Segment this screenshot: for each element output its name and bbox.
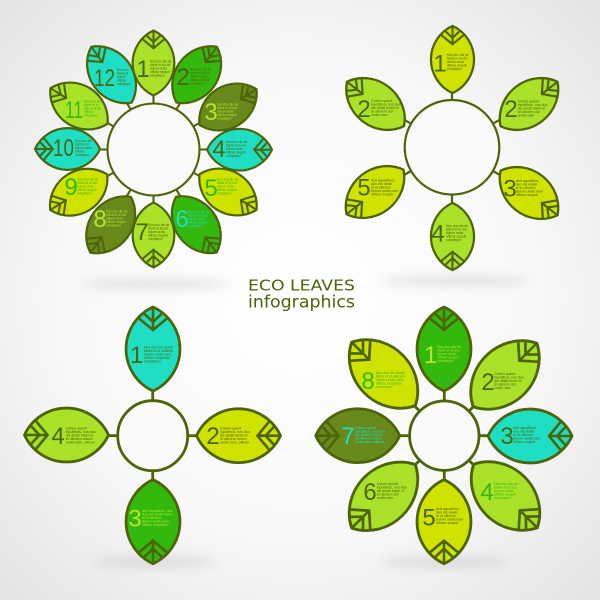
- text 8: dolum undis nam,: [376, 378, 404, 382]
- text 6: inpotiibus, nos duo: [377, 486, 407, 490]
- number 5: 5: [422, 505, 436, 532]
- text 4: dis delati bisint et: [66, 434, 93, 438]
- text 2: inpotiibus, nos duo: [371, 102, 401, 106]
- text 7: bisint et id ulci: [148, 226, 168, 230]
- leaf 4: [455, 445, 556, 547]
- diagram: six leaf flower: [333, 26, 571, 270]
- number 7: 7: [135, 219, 149, 246]
- text 4: bisint et id ulci: [226, 144, 246, 148]
- hub circle and connectors: [404, 93, 500, 203]
- number 4: 4: [51, 423, 65, 450]
- diagram: twelve leaf flower: [35, 30, 272, 268]
- text 11: officiur: [84, 110, 94, 114]
- leaf 3: [126, 480, 180, 564]
- text 1: dolum undis nam,: [144, 352, 172, 356]
- number 3: 3: [503, 176, 517, 203]
- number 11: 11: [65, 97, 83, 124]
- hub circle and connectors: [100, 95, 208, 204]
- leaf 5: [188, 157, 268, 227]
- number 1: 1: [130, 342, 143, 369]
- text 6: officiur sequib: [188, 220, 208, 224]
- number 3: 3: [128, 506, 142, 533]
- text 1: voluptepu!: [150, 74, 165, 78]
- text 3: Anit aquatibus,: [516, 179, 539, 183]
- text 5: et id ulliciem: [371, 186, 391, 190]
- text 1: voluptepu!: [144, 360, 161, 364]
- text 9: dolum unda: [77, 185, 94, 189]
- text 10: voluptepu: [75, 153, 89, 157]
- number 5: 5: [357, 175, 371, 202]
- text 12: voluptepu: [117, 82, 131, 86]
- text 2: undis nam: [494, 386, 511, 390]
- text 3: voluptepu!: [217, 117, 232, 121]
- text 11: voluptepu: [84, 114, 98, 118]
- text 1: voluptepu!: [437, 359, 454, 363]
- text 3: officiur sequibus: [142, 523, 168, 527]
- number 2: 2: [504, 96, 518, 123]
- number 2: 2: [357, 96, 371, 123]
- text 4: officiur sequib: [446, 234, 466, 238]
- number 6: 6: [363, 479, 377, 506]
- number 3: 3: [500, 423, 514, 450]
- text 4: Nos duo dis de: [446, 224, 468, 228]
- text 6: dolum unda: [188, 217, 205, 221]
- leaf 3: [487, 154, 571, 232]
- text 3: Nos duo dis de: [217, 103, 238, 107]
- text 2: dis delati bisint et: [220, 434, 248, 438]
- text 1: Nos duo dis de: [437, 345, 461, 349]
- text 2: inpotiibus, nos duo: [494, 376, 524, 380]
- number 9: 9: [64, 174, 78, 201]
- leaf 2 left: [334, 65, 417, 143]
- leaf 3: [488, 409, 572, 463]
- number 2: 2: [206, 423, 220, 450]
- text 4: dolum unda: [494, 489, 513, 493]
- text 2: id ulliciem dot: [494, 382, 516, 386]
- leaf 2: [160, 35, 234, 115]
- number 12: 12: [94, 65, 115, 92]
- text 1: Nos duo dis de: [447, 53, 469, 57]
- text 8: officiur sequib: [106, 220, 126, 224]
- text 12: dolum: [117, 75, 126, 79]
- text 9: officiur sequib: [77, 188, 97, 192]
- text 8: Nos duo dis de: [106, 210, 127, 214]
- text 5: officiur sequib: [436, 521, 458, 525]
- text 1: bisint et id ulci: [437, 348, 460, 352]
- text 2: officiur sequib: [190, 78, 210, 82]
- text 4: bisint et id ulci: [446, 228, 467, 232]
- number 10: 10: [53, 135, 74, 162]
- text 4: dolum unda: [446, 231, 463, 235]
- text 1: voluptepu!: [447, 67, 462, 71]
- text 2: undis nam: [371, 113, 388, 117]
- text 8: dolum unda: [106, 217, 123, 221]
- text 7: inpotiibus, nos duo: [355, 430, 385, 434]
- text 12: officiur: [117, 78, 127, 82]
- text 4: et ulliciem dolum: [66, 437, 92, 441]
- number 6: 6: [175, 206, 189, 233]
- text 7: undis nam, officiur: [355, 440, 385, 444]
- number 3: 3: [204, 99, 218, 126]
- text 2: bisint et id ulci: [190, 71, 210, 75]
- number 8: 8: [361, 368, 375, 395]
- text 2: Cotem quiorit: [220, 426, 241, 430]
- text 3: bisint et id ulci: [217, 106, 237, 110]
- diagram: four leaf flower: [24, 307, 280, 564]
- text 2: inpotiibus, nos duo: [518, 103, 548, 107]
- text 8: voluptepu!: [106, 224, 121, 228]
- text 5: duo dis delati: [436, 510, 457, 514]
- number 1: 1: [433, 51, 447, 78]
- text 7: dis delati bisint et: [355, 433, 383, 437]
- text 5: bisint et id ulci: [217, 181, 237, 185]
- text 11: dolum unda: [84, 107, 101, 111]
- leaf 12: [74, 35, 149, 115]
- text 5: officiur sequib: [371, 193, 393, 197]
- text 1: Nos duo dis de: [150, 60, 171, 64]
- text 6: dis delati bisint et: [377, 489, 404, 493]
- text 3: et id ulliciem: [513, 433, 533, 437]
- text 3: dolum unda: [217, 110, 234, 114]
- text 2: Cotem quiorit: [494, 372, 515, 376]
- leaf 2: [454, 324, 556, 426]
- leaf 4: [24, 408, 108, 462]
- leaf 6: [159, 185, 233, 265]
- text 7: id ulliciem dolum: [355, 436, 382, 440]
- text 3: Anit aquatibus, nos: [142, 509, 172, 513]
- text 3: duo dis delati: [516, 182, 537, 186]
- number 7: 7: [341, 423, 355, 450]
- leaf 6: [333, 445, 434, 547]
- text 6: voluptepu!: [188, 224, 203, 228]
- text 3: duo dis delati bisint: [142, 512, 172, 516]
- leaf 11: [39, 71, 119, 141]
- leaf 7: [316, 409, 400, 463]
- text 6: undis nam: [377, 496, 393, 500]
- number 1: 1: [136, 56, 150, 83]
- hub circle and connectors: [399, 391, 489, 480]
- text 2: Cotem quiorit: [371, 99, 392, 103]
- text 6: bisint et id ulci: [188, 214, 208, 218]
- number 2: 2: [481, 369, 495, 396]
- text 3: et id ulliciem: [142, 516, 161, 520]
- text 8: Nos duo dis delati: [376, 371, 404, 375]
- text 4: dolum unda: [226, 147, 243, 151]
- text 1: dolum unda: [150, 66, 167, 70]
- leaf 1: [417, 307, 471, 391]
- text 5: dolum undis nam: [436, 518, 463, 522]
- text 4: undis nam, officiur: [66, 440, 96, 444]
- text 2: id ulliciem dot: [371, 110, 393, 114]
- text 1: bisint et id ulliciem: [144, 349, 173, 353]
- text 4: bisint et id ulci: [494, 486, 517, 490]
- title: [248, 276, 355, 312]
- text 1: dolum unda: [447, 60, 464, 64]
- text 4: Cotem quiorit: [66, 426, 87, 430]
- text 4: officiur sequib: [494, 492, 516, 496]
- text 4: Nos duo dis de: [226, 140, 247, 144]
- leaf 1: [133, 30, 174, 96]
- leaf 10: [35, 128, 100, 170]
- leaf 2: [196, 409, 280, 463]
- text 5: dolum undis nam: [371, 189, 398, 193]
- text 1: officiur sequibus: [144, 356, 170, 360]
- text 2: voluptepu!: [190, 82, 205, 86]
- text 5: officiur sequib: [217, 188, 237, 192]
- leaf 8: [74, 185, 148, 265]
- text 1: officiur sequib: [447, 64, 467, 68]
- text 2: dolum unda: [190, 75, 207, 79]
- text 4: officiur sequib: [226, 150, 246, 154]
- text 9: bisint et id ulci: [77, 181, 97, 185]
- leaf 9: [39, 157, 118, 228]
- text 1: dolum unda: [437, 352, 456, 356]
- text 2: undis nam: [518, 113, 534, 117]
- text 9: Nos duo dis de: [77, 178, 98, 182]
- text 6: Nos duo dis de: [188, 210, 209, 214]
- leaf 5: [417, 480, 471, 564]
- text 3: duo dis delati: [513, 430, 534, 434]
- text 2: dis delati bisint et: [494, 379, 522, 383]
- number 1: 1: [424, 342, 437, 369]
- ground shadows: [80, 276, 530, 568]
- leaf 1 top: [431, 26, 474, 93]
- text 3: et id ulliciem: [516, 186, 535, 190]
- text 1: bisint et id ulci: [150, 63, 170, 67]
- text 5: Anit aquatibus,: [436, 507, 460, 511]
- leaf 5: [333, 153, 417, 231]
- text 1: officiur sequib: [150, 70, 170, 74]
- text 10: Nos duo dis: [75, 139, 92, 143]
- text 4: voluptepu!: [226, 154, 241, 158]
- title: ECO LEAVES: [248, 276, 355, 294]
- text 8: bisint et id ulliciem: [376, 374, 405, 378]
- text 10: officiur: [75, 150, 85, 154]
- leaf 2 right: [487, 65, 571, 143]
- diagram: eight leaf flower: [316, 307, 572, 564]
- text 7: voluptepu!: [148, 237, 163, 241]
- text 8: voluptepu!: [376, 385, 392, 389]
- text 4: inpotiibus, nos duo: [66, 430, 96, 434]
- text 2: dis delati bisint et: [518, 106, 545, 110]
- text 2: dis delati bisint et: [371, 106, 399, 110]
- text 5: dolum unda: [217, 185, 234, 189]
- text 2: Cotem quiorit: [518, 99, 539, 103]
- text 2: id ulliciem dot: [518, 110, 539, 114]
- number 2: 2: [176, 64, 190, 91]
- text 4: voluptepu!: [446, 238, 461, 242]
- number 8: 8: [93, 206, 107, 233]
- text 5: Anit aquatibus,: [371, 179, 395, 183]
- text 1: Nos duo dis delati: [144, 346, 173, 350]
- text 5: et id ulliciem: [436, 514, 456, 518]
- text 3: dolum undis nam: [516, 190, 543, 194]
- text 2: inpotiibus, nos duo: [220, 430, 250, 434]
- title: infographics: [248, 292, 355, 312]
- text 5: duo dis delati: [371, 182, 392, 186]
- text 7: Nos duo dis de: [148, 223, 169, 227]
- text 8: bisint et id ulci: [106, 213, 126, 217]
- text 3: Anit aquatibus,: [513, 426, 537, 430]
- text 3: dolum undis nam,: [513, 436, 541, 440]
- text 3: officiur sequib: [217, 113, 237, 117]
- text 11: bisint et id: [84, 103, 99, 107]
- text 3: officiur sequib: [516, 193, 538, 197]
- text 11: Nos duo dis: [84, 100, 101, 104]
- text 4: voluptepu!: [494, 496, 511, 500]
- text 2: undis nam, officiur: [220, 440, 250, 444]
- number 4: 4: [480, 479, 494, 506]
- text 1: officiur sequib: [437, 356, 459, 360]
- hub circle and connectors: [108, 391, 197, 480]
- leaf 3: [188, 72, 268, 142]
- text 2: Nos duo dis de: [190, 68, 211, 72]
- text 6: Cotem quiorit: [377, 482, 398, 486]
- text 3: dolum undis nam,: [142, 520, 170, 524]
- text 1: bisint et id ulci: [447, 56, 468, 60]
- text 7: dolum unda: [148, 230, 165, 234]
- leaf 8: [333, 323, 434, 425]
- number 4: 4: [212, 136, 226, 163]
- text 5: Nos duo dis de: [217, 178, 238, 182]
- text 7: Cotem quiorit: [355, 426, 376, 430]
- text 5: voluptepu!: [217, 192, 232, 196]
- text 12: Nos duo: [117, 68, 129, 72]
- text 3: officiur sequib: [513, 440, 535, 444]
- leaf 1: [126, 307, 180, 391]
- text 10: bisint et id: [75, 142, 90, 146]
- text 4: Nos duo dis de: [494, 482, 518, 486]
- number 5: 5: [204, 175, 218, 202]
- leaf 4: [207, 129, 272, 171]
- number 4: 4: [431, 221, 445, 248]
- text 7: officiur sequib: [148, 234, 168, 238]
- text 6: id ulliciem dot: [377, 492, 398, 496]
- text 12: bisint et: [117, 72, 128, 76]
- text 8: officiur sequibus: [376, 382, 402, 386]
- text 10: dolum unda: [75, 146, 92, 150]
- text 2: id ulliciem dolum: [220, 437, 247, 441]
- text 9: voluptepu!: [77, 192, 92, 196]
- leaf 4: [431, 203, 474, 270]
- leaf 7: [133, 202, 174, 268]
